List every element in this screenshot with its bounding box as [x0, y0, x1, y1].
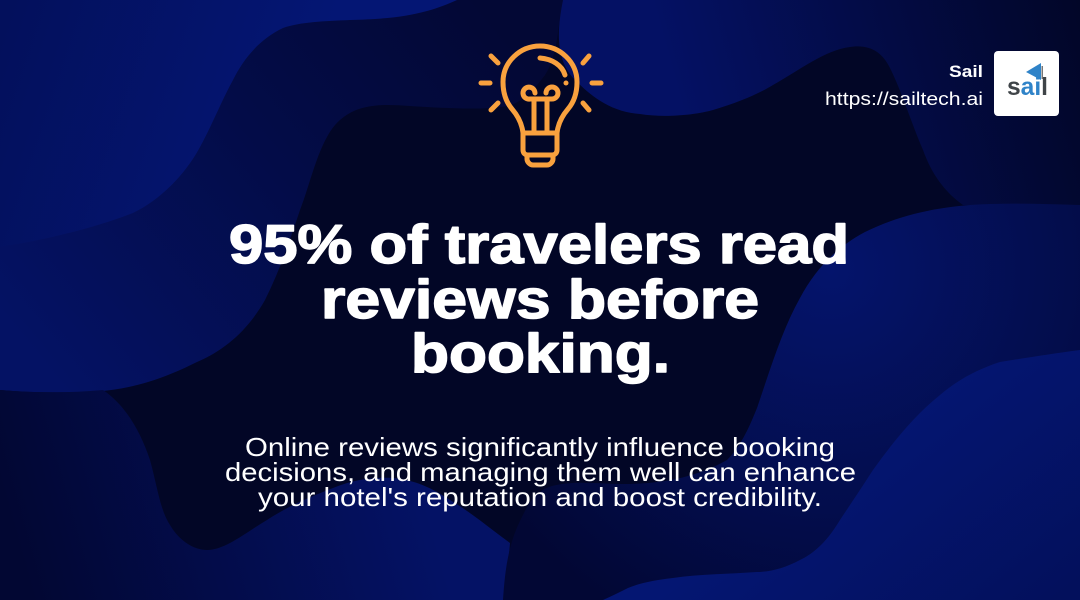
description text: [225, 432, 856, 512]
bulb base: [523, 133, 557, 155]
brand url: https://sailtech.ai: [825, 89, 983, 109]
title: booking.: [411, 322, 670, 384]
description text: your hotel's reputation and boost credibility.: [258, 482, 822, 512]
rays: [481, 56, 601, 110]
highlight arc: [540, 58, 565, 75]
description text: Online reviews significantly influence booking: [245, 432, 835, 462]
highlight dot: [564, 80, 568, 86]
bulb glass outline: [503, 46, 577, 133]
title: 95% of travelers read: [229, 213, 849, 275]
title: [229, 213, 849, 384]
logo: sail: sail: [1007, 73, 1048, 101]
title: reviews before: [321, 268, 759, 330]
icon: light bulb: [481, 46, 601, 165]
bulb cap: [527, 155, 553, 165]
description text: decisions, and managing them well can enhance: [225, 457, 856, 487]
logo: sail: [994, 51, 1059, 116]
filament: [523, 87, 558, 133]
brand name: Sail: [949, 62, 983, 81]
